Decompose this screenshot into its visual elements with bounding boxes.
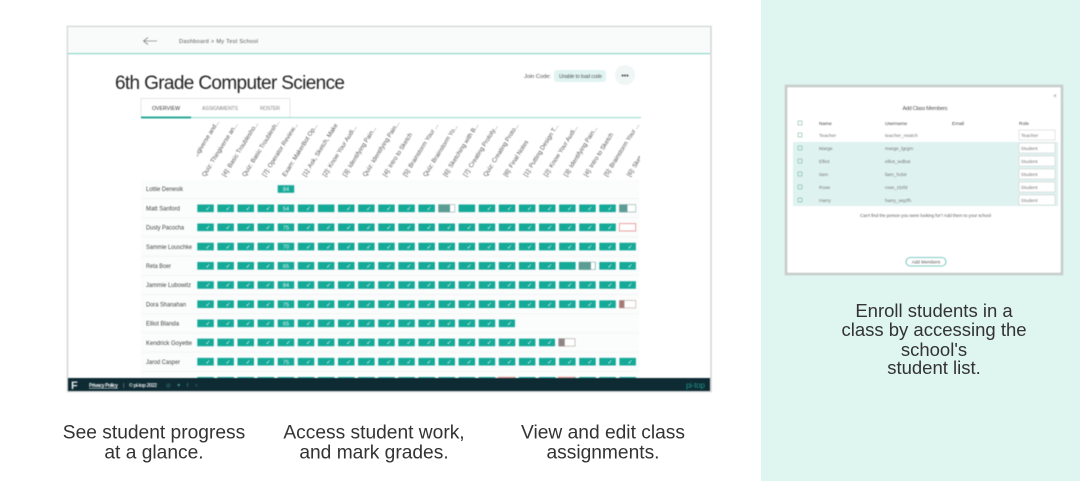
grade cells: ✓✓✓✓✓✓✓✓✓✓✓✓✓✓✓✓✓✓✓✓✓ (206, 359, 633, 366)
member table: Email (952, 121, 964, 127)
member table (793, 121, 1058, 206)
rotated assignment headers: [8]: Final Notes (502, 139, 530, 178)
tabs (141, 98, 641, 118)
student names: Reta Boer (146, 263, 171, 270)
rotated assignment headers: [7]: Operator Review... (261, 122, 300, 178)
member table: Student (1021, 159, 1038, 165)
caption: enroll students: Enroll students in a (855, 300, 1013, 321)
add class members dialog (786, 86, 1062, 274)
add to school note: Can't find the person you were looking for? Add them to your school (860, 213, 991, 218)
student names: Kendrick Goyette (146, 340, 193, 347)
student names: Jarod Casper (146, 359, 180, 366)
student names: Dusty Pacocha (146, 225, 185, 232)
caption: enroll students: student list. (887, 357, 981, 378)
tabs: ASSIGNMENTS (202, 106, 239, 112)
caption: student progress: at a glance. (104, 442, 204, 464)
add members button (906, 258, 946, 266)
tabs: OVERVIEW (152, 106, 180, 112)
rotated assignment headers: [4]: Intro to Sketch (583, 131, 616, 178)
rotated assignment headers: [7]: Creating Prototy... (462, 123, 500, 178)
grade table (141, 180, 639, 381)
footer bar: ◎ ♥ f ○ (166, 383, 198, 389)
member table: Username (885, 121, 907, 127)
member table: Teacher (1021, 133, 1038, 139)
grade cells (197, 185, 636, 381)
member table: Rose (819, 185, 831, 191)
grade cells: 75 (283, 225, 289, 231)
caption: student work: Access student work, (283, 422, 465, 444)
member table: liam_hcbir (885, 172, 907, 178)
grade cells: ✓✓✓✓✓✓✓✓✓✓✓✓✓✓✓✓✓✓✓✓ (206, 301, 613, 308)
rotated assignment headers: [3]: Identifying Pain... (341, 125, 378, 178)
grade cells: 70 (283, 245, 289, 251)
grade cells: 75 (283, 302, 289, 308)
member table: Name (819, 121, 832, 127)
member table: Elliot (819, 159, 830, 165)
grade cells: 65 (283, 264, 289, 270)
footer bar: Privacy Policy (89, 383, 118, 389)
header bar (68, 27, 710, 54)
breadcrumb: Dashboard > My Test School (179, 39, 258, 45)
rotated assignment headers: [6]: Sketching... (626, 138, 654, 178)
rotated assignment headers: [5]: Brainstorm Your ... (402, 122, 440, 178)
grade cells: ✓✓✓✓✓✓✓✓✓✓✓✓✓✓✓✓✓✓✓✓✓ (206, 282, 633, 289)
member table: Marge (819, 146, 833, 152)
grade cells: ✓✓✓✓✓✓✓✓✓✓✓✓✓✓✓✓✓✓✓✓ (206, 224, 613, 232)
member table: Student (1021, 172, 1038, 178)
tabs: ROSTER (260, 106, 280, 112)
rotated assignment headers: Quiz: Brainstorm Yo... (422, 123, 460, 178)
student names: Matt Sanford (146, 206, 181, 212)
join code (524, 70, 606, 82)
footer bar: © pi-top 2022 (129, 382, 157, 389)
rotated assignment headers (196, 122, 640, 178)
grade cells: 75 (283, 360, 289, 366)
member table: marge_lgrgm (885, 146, 913, 152)
member table: Student (1021, 146, 1038, 152)
member table: Iiam (819, 172, 828, 178)
footer bar: F (71, 380, 78, 392)
caption: class assignments: View and edit class (521, 422, 685, 444)
rotated assignment headers: [6]: Sketching with B... (442, 122, 480, 178)
partial grade cells (438, 204, 636, 346)
rotated assignment headers: [1]: Putting Design T... (522, 123, 560, 178)
member table: harry_wqzfh (885, 198, 911, 204)
join code: Join Code: (524, 74, 551, 80)
caption: enroll students: school's (901, 339, 967, 360)
member table: rose_t3zfd (885, 185, 908, 191)
rotated assignment headers: Quiz: Basic Troublesh... (241, 119, 282, 178)
rotated assignment headers: Quiz: Thingiverse an... (201, 122, 240, 178)
add class members dialog: Add Class Members (902, 106, 948, 112)
student names: Dora Shanahan (146, 301, 187, 308)
member table: Role (1019, 121, 1029, 127)
rotated assignment headers: [5]: Brainstorm Your ... (603, 122, 641, 178)
rotated assignment headers: [1]: Ask, Sketch, Make (301, 122, 340, 178)
rotated assignment headers: Quiz: Identifying Pain... (362, 120, 401, 178)
panel: enroll students (761, 0, 1080, 481)
more options button (615, 65, 635, 85)
caption: student progress: See student progress (63, 422, 245, 444)
grade cells: 84 (283, 187, 289, 193)
rotated assignment headers: [2]: Know Your Audi... (321, 124, 359, 178)
grade cells: ✓✓✓✓✓✓✓✓✓✓✓✓✓✓✓✓✓✓✓✓✓ (206, 244, 633, 251)
grade cells: 84 (283, 283, 289, 289)
grade cells: ✓✓✓✓✓✓✓✓✓✓✓✓✓✓✓✓✓ (206, 206, 613, 212)
rotated assignment headers: Exam: MakerBot Op... (281, 122, 319, 178)
more options button: ••• (621, 73, 629, 80)
grade cells: ✓✓✓✓✓✓✓✓✓✓✓✓✓✓✓ (206, 320, 512, 328)
member table: Student (1021, 185, 1038, 191)
student names: Elliot Blanda (146, 321, 180, 328)
footer bar: pi-top (686, 381, 706, 390)
panel: class overview screenshot (68, 26, 711, 392)
add class members dialog: × (1053, 94, 1057, 100)
student names: Lottie Denesik (146, 186, 184, 193)
grade cells: ✓✓✓✓✓✓✓✓✓✓✓✓✓✓✓✓✓✓✓ (206, 263, 633, 270)
rotated assignment headers: Quiz: Thingiverse and... (181, 119, 221, 178)
footer bar: | (123, 383, 124, 389)
caption: class assignments: assignments. (546, 442, 660, 464)
member table: elliot_wdbat (885, 159, 911, 165)
rotated assignment headers: [4]: Basic Troublesho... (221, 121, 260, 178)
caption: student work: and mark grades. (299, 442, 449, 464)
rotated assignment headers: [4]: Intro to Sketch (382, 131, 415, 178)
grade cells: 65 (283, 321, 289, 327)
rotated assignment headers: Quiz: Creating Proto... (482, 122, 521, 178)
student names: Sammie Louschke (146, 244, 192, 251)
member table: Harry (819, 198, 831, 204)
add members button: Add Members (912, 260, 941, 264)
member table: teacher_rwatch (885, 133, 918, 139)
join code: Unable to load code (559, 74, 602, 80)
grade cells: ✓✓✓✓✓✓✓✓✓✓✓✓✓✓✓✓✓✓ (206, 340, 552, 347)
icon: back arrow (144, 38, 157, 44)
rotated assignment headers: [3]: Identifying Pain... (563, 125, 599, 178)
student names: Jammie Lubowitz (146, 282, 191, 289)
footer bar (68, 378, 710, 392)
member table: Student (1021, 198, 1038, 204)
title: 6th Grade Computer Science (115, 73, 345, 94)
caption: enroll students: class by accessing the (841, 319, 1027, 340)
grade cells: 54 (283, 206, 289, 212)
rotated assignment headers: [2]: Know Your Audi... (542, 124, 580, 178)
member table: Teacher (819, 133, 836, 139)
student names (146, 186, 193, 366)
